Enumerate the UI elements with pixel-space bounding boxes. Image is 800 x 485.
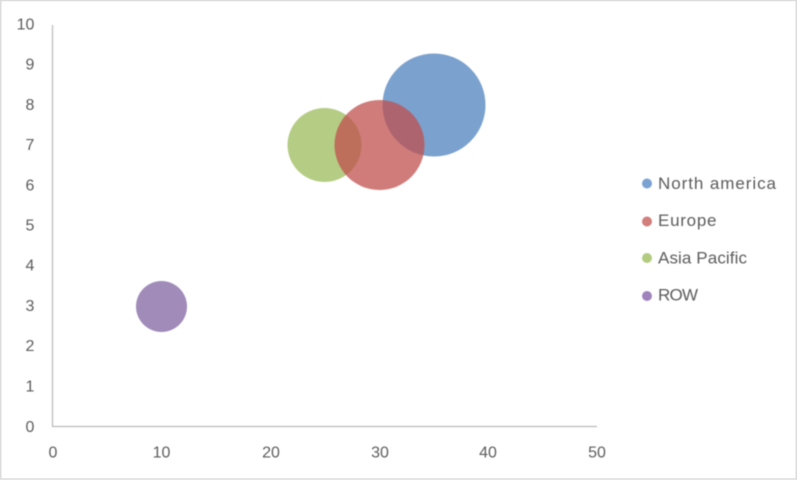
legend item: ROW: ROW [658,286,698,304]
y axis labels: 10 [17,16,34,34]
y axis labels: 5 [26,218,35,234]
bubble: Europe [334,100,424,190]
x axis labels: 40 [479,444,497,462]
y axis labels: 6 [26,177,35,194]
legend item: Europe: Europe [658,211,716,230]
bubble: Asia Pacific [288,108,362,182]
legend [642,174,777,304]
bubble: North america [382,54,486,156]
y axis labels: 1 [26,378,35,395]
x axis labels: 10 [153,444,170,462]
x axis labels [49,444,606,462]
x axis labels: 0 [49,444,58,462]
legend item: Asia Pacific: Asia Pacific [658,248,748,268]
y axis labels: 7 [26,137,35,154]
legend item: North america: North america [658,174,777,193]
y axis labels: 4 [26,258,35,275]
y axis labels: 0 [26,419,35,436]
y axis labels: 2 [26,338,35,355]
x axis labels: 50 [588,444,606,462]
y axis labels [17,16,35,436]
y axis labels: 3 [26,298,35,315]
axes [52,25,597,426]
y axis labels: 8 [26,97,35,114]
bubbles [136,54,486,332]
x axis labels: 30 [371,444,389,462]
bubble: ROW [136,281,187,332]
y axis labels: 9 [26,57,35,74]
x axis labels: 20 [262,444,280,462]
